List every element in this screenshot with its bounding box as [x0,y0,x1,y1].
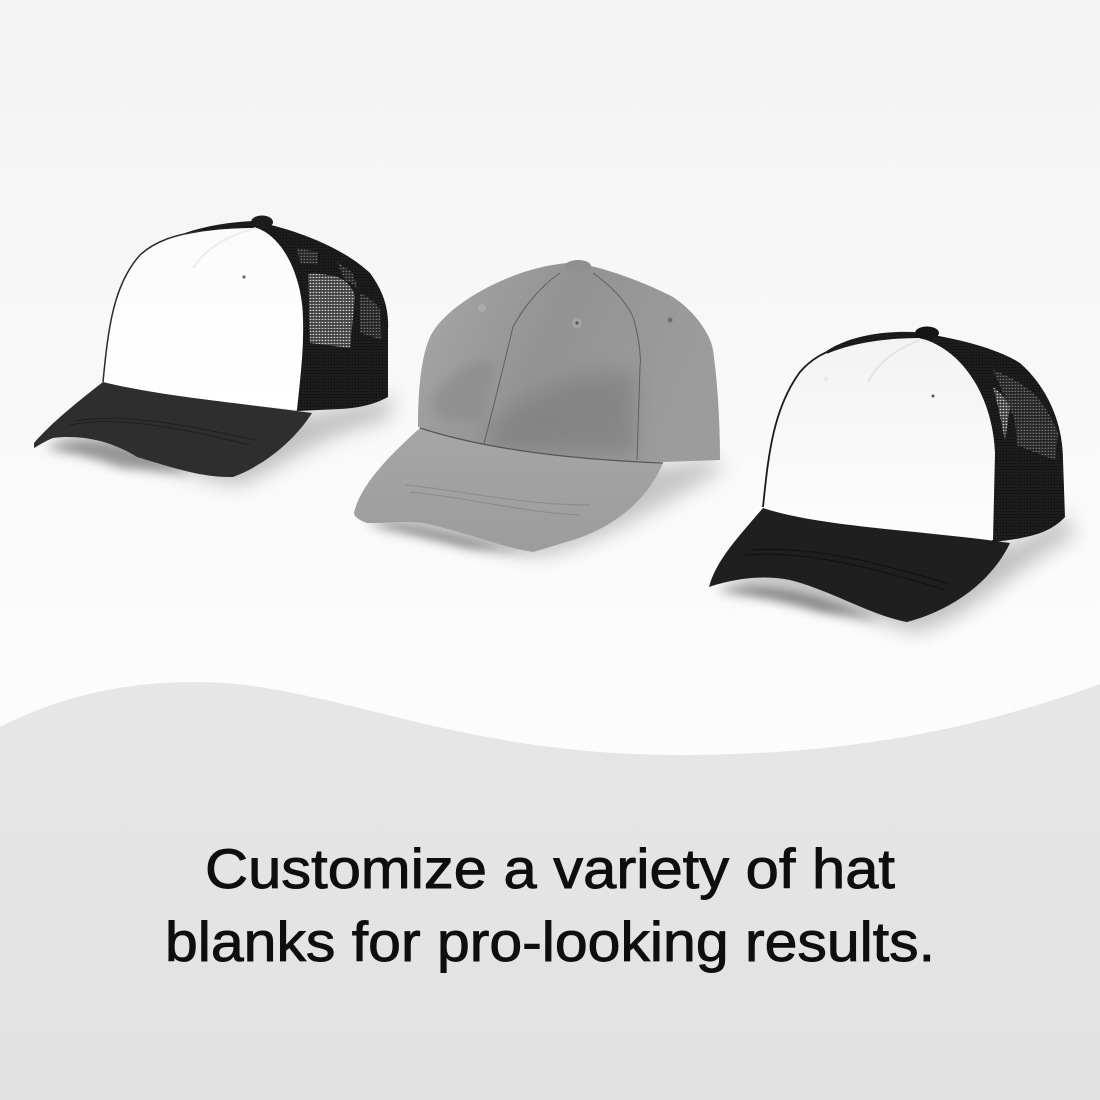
mesh highlight top [297,248,358,288]
visor [34,382,312,477]
white front panel [763,338,995,540]
top button [251,216,273,228]
eyelet [242,275,246,279]
seam shadow [420,428,663,463]
panel seams [483,273,640,460]
eyelets [478,304,672,328]
caption line 1: Customize a variety of hat [205,837,895,900]
mesh opening small [360,293,382,340]
top button [915,326,939,340]
shadow [715,515,1075,632]
top button [565,260,591,272]
mesh opening large [308,274,355,348]
seam crease [868,340,920,382]
visor stitching [745,549,950,590]
seam crease [193,228,256,268]
crown edge line [103,231,200,382]
visor stitching [405,485,590,515]
mesh opening sliver [993,387,1010,442]
shadow [365,458,722,556]
visor stitching [70,418,255,445]
mesh back [825,332,1065,542]
crown edge line [763,347,840,507]
mesh opening right [993,370,1058,460]
caption line 2: blanks for pro-looking results. [165,910,935,973]
caption text [165,837,935,973]
hat: right black and white trucker [709,326,1075,632]
wave panel [0,682,1100,1100]
mesh back [185,221,388,411]
visor [709,508,1010,622]
visor [354,428,663,552]
hat: middle gray cap [354,260,722,556]
crown [418,263,720,462]
shadow [45,395,395,485]
eyelets [824,376,934,398]
shading patches [430,360,636,455]
white front panel [103,228,303,410]
hat: left black and white trucker [34,216,395,485]
